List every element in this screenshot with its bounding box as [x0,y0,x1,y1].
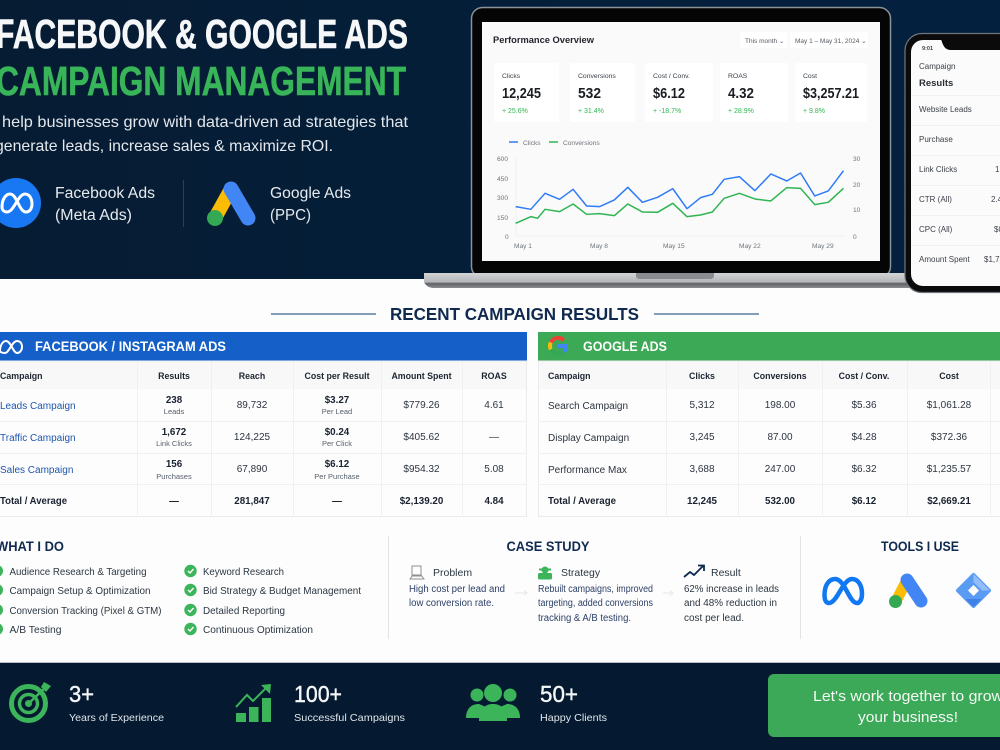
icon: result [684,566,704,577]
chart axes: 300 [497,195,508,202]
step: result: and 48% reduction in [684,598,777,609]
checklist left [0,565,162,636]
table column heads: Amount Spent [391,371,452,381]
step: result: cost per lead. [684,613,744,624]
table column heads: Cost per Result [304,371,370,381]
footer band [0,662,1000,750]
row: sales campaign: Per Purchase [314,472,360,481]
laptop screen [482,22,880,261]
row: performance max: 3,688 [689,464,715,475]
row: search campaign [548,400,972,412]
row: traffic campaign: $0.24 [325,427,350,438]
table frame [538,361,1000,517]
icon: problem [410,566,424,579]
chart axes: May 22 [739,243,761,250]
subtitle [0,114,409,155]
row: sales campaign: Purchases [156,472,192,481]
icon: tag manager [958,574,990,607]
checklist left: A/B Testing [10,625,62,636]
platform: Facebook Ads: Facebook Ads [55,185,155,202]
row: leads campaign [0,395,504,416]
step: problem: low conversion rate. [409,598,494,609]
icon: people [466,684,520,721]
table header bar [0,332,527,361]
call to action button: your business! [858,709,958,726]
series: clicks and conversions [516,171,843,223]
row: traffic campaign: $405.62 [403,432,440,443]
icon: google ads [889,580,921,608]
panel: google table [538,332,1000,517]
row: display campaign [548,432,968,444]
step: strategy: Strategy [561,567,601,579]
table header bar: GOOGLE ADS [583,339,667,354]
row: search campaign: 5,312 [689,400,715,411]
section heading: RECENT CAMPAIGN RESULTS [390,304,639,324]
row: performance max: $1,235.57 [927,464,972,475]
phone screen: CTR (All) [919,195,952,204]
checklist right: Detailed Reporting [203,606,285,617]
row: performance max: Performance Max [548,465,627,476]
chart axes: 450 [497,176,508,183]
row: display campaign: $4.28 [851,432,877,443]
stat: clients [466,681,607,724]
heading: TOOLS I USE [881,538,959,554]
kpi: roas: + 28.9% [728,108,754,115]
subtitle: generate leads, increase sales & maximize ROI. [0,138,333,155]
chart axes: 0 [853,234,857,241]
row: total: — [169,496,179,507]
table header bar: FACEBOOK / INSTAGRAM ADS [35,339,226,354]
chart axes: May 15 [663,243,685,250]
row: search campaign: $5.36 [851,400,877,411]
chart legend [509,140,600,147]
row: total [548,496,971,507]
table column heads: ROAS [481,371,507,381]
stat: clients: Happy Clients [540,712,607,724]
row: traffic campaign [0,427,499,448]
row: search campaign: 198.00 [765,400,796,411]
chart axes: May 8 [590,243,608,250]
hero background [0,0,1000,279]
row: display campaign: 87.00 [767,432,793,443]
checklist right: Bid Strategy & Budget Management [203,586,361,597]
chart axes [497,156,861,250]
date filters: May 1 – May 31, 2024 ⌄ [795,38,867,45]
row: total: Total / Average [0,496,68,507]
table column heads [548,371,959,381]
step: result: Result [711,567,741,579]
row: total: 4.84 [484,496,504,507]
step: strategy: Rebuilt campaigns, improved [538,584,653,595]
kpi: conversions: + 31.4% [578,108,604,115]
chart axes: 600 [497,156,508,163]
table column heads: Conversions [753,371,807,381]
laptop [424,8,930,288]
phone screen [911,39,1000,286]
chart axes: 150 [497,215,508,222]
call to action button [768,674,1000,737]
row: traffic campaign: — [489,432,499,443]
checklist left: Audience Research & Targeting [10,567,147,578]
kpi: roas [720,63,788,122]
icon: google ads [207,189,248,226]
row: performance max [548,464,972,476]
table column heads: Clicks [689,371,715,381]
checklist left: Conversion Tracking (Pixel & GTM) [10,606,162,617]
laptop lid [472,8,890,278]
heading: CASE STUDY [506,538,590,554]
chart axes: May 1 [514,243,532,250]
stat: campaigns: Successful Campaigns [294,712,405,724]
call to action button: Let's work together to grow [813,688,1000,705]
phone [905,34,1000,292]
phone body [905,34,1000,292]
row: total [0,496,504,507]
row: sales campaign: 156 [166,459,183,470]
chart axes: 10 [853,207,861,214]
date filters: This month ⌄ [745,38,784,45]
table column heads: Campaign [0,371,43,381]
row: sales campaign [0,459,504,481]
row: display campaign: 3,245 [689,432,715,443]
row: leads campaign: 89,732 [237,400,268,411]
row: sales campaign: 67,890 [237,464,268,475]
kpi: cost: + 9.8% [803,108,825,115]
chart legend: Clicks [523,140,541,147]
kpi: clicks: + 25.6% [502,108,528,115]
table header bar [538,332,1000,361]
panel: case study [409,538,779,624]
chart legend: Conversions [563,140,600,147]
platform: Facebook Ads: (Meta Ads) [55,207,132,224]
kpi: conversions: Conversions [578,73,616,80]
kpi: cost per conversion: + -18.7% [653,108,681,115]
table frame [0,361,527,517]
arrow [515,590,527,596]
platform: Google Ads: Google Ads [270,185,351,202]
kpi: cost: Cost [803,73,817,80]
phone screen: CPC (All) [919,225,953,234]
stat: campaigns: 100+ [294,681,342,707]
checklist right [184,565,361,636]
icon: meta circle [0,178,41,228]
row: traffic campaign: Link Clicks [156,439,192,448]
subtitle: I help businesses grow with data-driven ad strategies that [0,114,409,131]
step: strategy [538,566,653,624]
platform: Google Ads: (PPC) [270,207,311,224]
kpi: cost per conversion: Cost / Conv. [653,73,690,80]
stat: experience: 3+ [69,681,94,707]
stat: experience: Years of Experience [69,712,164,724]
row: total: 532.00 [765,496,796,507]
row: display campaign: $372.36 [931,432,968,443]
table column heads: Campaign [548,371,591,381]
row: total: Total / Average [548,496,617,507]
table column heads [0,371,507,381]
phone screen: 9:01 [922,46,933,52]
kpi: clicks [494,63,559,122]
row: search campaign: Search Campaign [548,401,628,412]
platform: Facebook Ads [0,178,155,228]
step: problem [409,566,505,609]
chart axes: 30 [853,156,861,163]
kpi: conversions [570,63,635,122]
icon: strategy [538,566,552,580]
row: sales campaign: $954.32 [403,464,440,475]
row: total: $2,139.20 [400,496,444,507]
row: leads campaign: 4.61 [484,400,504,411]
platform: Google Ads [207,185,351,226]
checklist right: Continuous Optimization [203,625,313,636]
row: traffic campaign: 124,225 [234,432,271,443]
row: total: 12,245 [687,496,718,507]
title: FACEBOOK & GOOGLE ADS [0,11,408,57]
checklist right: Keyword Research [203,567,284,578]
row: leads campaign: $3.27 [325,395,350,406]
row: traffic campaign: Traffic Campaign [0,433,76,444]
icon: target [12,682,51,720]
panel: what i do [0,538,361,636]
table column heads: Cost [939,371,959,381]
row: sales campaign: $6.12 [325,459,350,470]
row: leads campaign: $779.26 [403,400,440,411]
stat: campaigns [236,681,405,724]
row: display campaign: Display Campaign [548,433,629,444]
row: total: $6.12 [852,496,877,507]
row: leads campaign: Leads Campaign [0,401,76,412]
row: sales campaign: Sales Campaign [0,465,73,476]
row: total: — [332,496,342,507]
kpi: conversions: 532 [578,86,601,102]
kpi: clicks: 12,245 [502,86,541,102]
kpi: cost per conversion [645,63,713,122]
row: total: $2,669.21 [927,496,971,507]
row: search campaign: $1,061.28 [927,400,972,411]
dashboard heading: Performance Overview [493,35,595,46]
step: problem: High cost per lead and [409,584,505,595]
table column heads: Reach [239,371,265,381]
chart axes: 0 [505,234,509,241]
phone screen: Results [919,78,953,89]
table column heads: Cost / Conv. [839,371,889,381]
row: leads campaign: 238 [166,395,183,406]
kpi: cost: $3,257.21 [803,86,859,102]
kpi: roas: ROAS [728,73,748,80]
checklist left: Campaign Setup & Optimization [10,586,151,597]
step: result: 62% increase in leads [684,584,779,595]
kpi: cost [795,63,867,122]
stat: clients: 50+ [540,681,578,707]
phone screen: Website Leads [919,105,972,114]
row: traffic campaign: 1,672 [162,427,187,438]
line chart [497,140,861,250]
phone screen: Purchase [919,135,953,144]
kpi: clicks: Clicks [502,73,521,80]
icon: meta [824,579,862,603]
date filters [740,32,868,48]
kpi: cost per conversion: $6.12 [653,86,685,102]
row: performance max: 247.00 [765,464,796,475]
arrow [663,590,673,596]
row: leads campaign: Per Lead [322,407,352,416]
step: problem: Problem [433,567,472,579]
table column heads: Results [158,371,190,381]
phone screen: Amount Spent [919,255,970,264]
row: performance max: $6.32 [851,464,877,475]
chart axes: 20 [853,182,861,189]
laptop base [424,273,930,288]
chart axes: May 29 [812,243,834,250]
icon: google g [550,338,566,354]
step: result [684,566,779,624]
title [0,11,408,104]
row: leads campaign: Leads [164,407,184,416]
stat: experience [12,681,164,724]
title: CAMPAIGN MANAGEMENT [0,58,406,104]
phone screen: Link Clicks [919,165,957,174]
step: strategy: tracking & A/B testing. [538,613,631,624]
row: traffic campaign: Per Click [322,439,352,448]
phone screen: Campaign [919,62,955,71]
panel: tools i use [824,538,990,608]
icon: growth chart [236,684,271,722]
kpi: roas: 4.32 [728,86,754,102]
panel: facebook table [0,332,527,517]
step: strategy: targeting, added conversions [538,598,653,609]
row: total: 281,847 [234,496,270,507]
row: sales campaign: 5.08 [484,464,504,475]
